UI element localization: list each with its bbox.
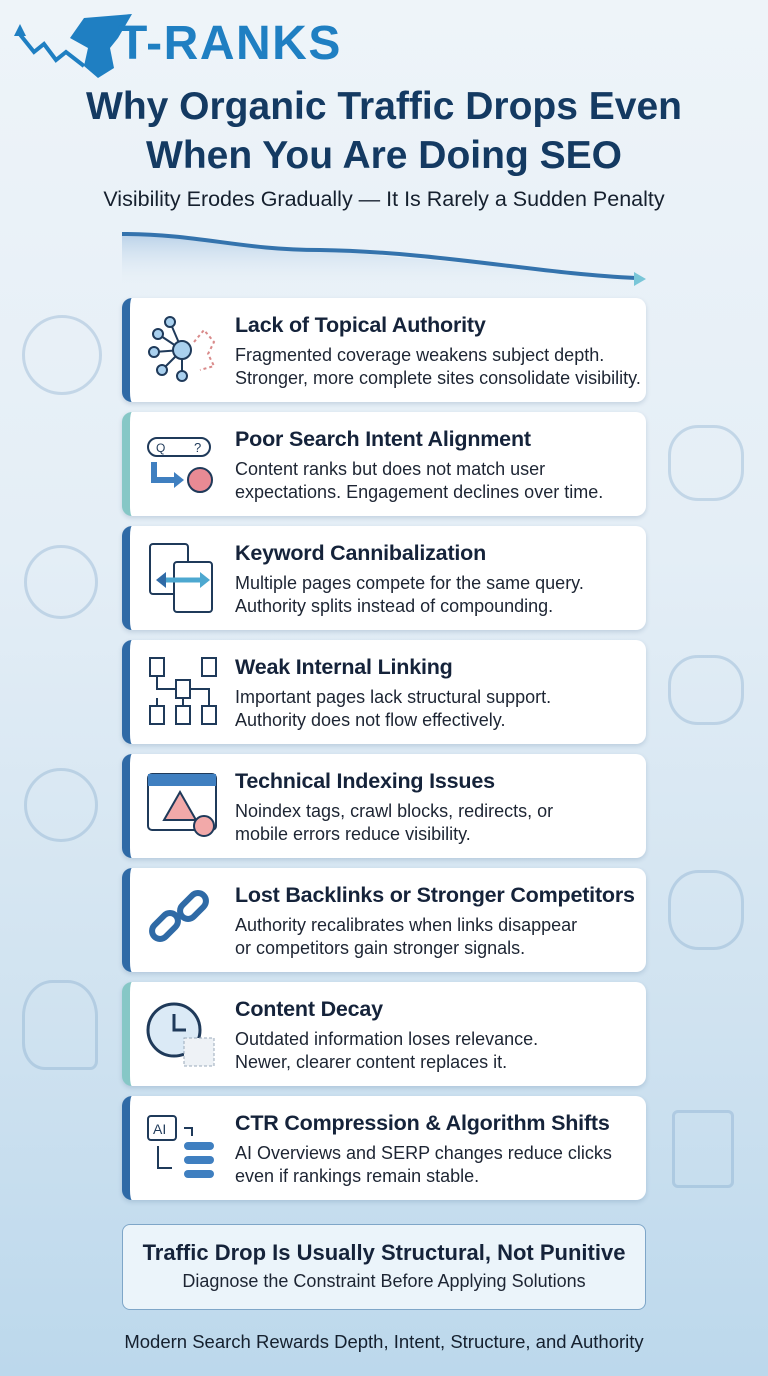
card 3 (122, 526, 646, 630)
icon: AI results (147, 1115, 214, 1178)
heading: Weak Internal Linking (235, 655, 453, 679)
logo (14, 14, 342, 78)
text: mobile errors reduce visibility. (235, 824, 471, 844)
heading: CTR Compression & Algorithm Shifts (235, 1111, 610, 1135)
heading: Keyword Cannibalization (235, 541, 486, 565)
text: Outdated information loses relevance. (235, 1029, 538, 1049)
icon: broken link (149, 890, 209, 942)
heading: Poor Search Intent Alignment (235, 427, 531, 451)
title: Why Organic Traffic Drops Even (86, 85, 682, 128)
text: Content ranks but does not match user (235, 459, 545, 479)
heading: Lack of Topical Authority (235, 313, 486, 337)
text: Authority recalibrates when links disappear (235, 915, 577, 935)
heading: Technical Indexing Issues (235, 769, 495, 793)
text (235, 459, 603, 502)
text: Fragmented coverage weakens subject depth. (235, 345, 604, 365)
summary text: Diagnose the Constraint Before Applying Solutions (182, 1271, 586, 1291)
text: even if rankings remain stable. (235, 1166, 479, 1186)
text: Authority does not flow effectively. (235, 710, 505, 730)
text: Multiple pages compete for the same query. (235, 573, 584, 593)
card 4 (122, 640, 646, 744)
text: Noindex tags, crawl blocks, redirects, or (235, 801, 553, 821)
text: Authority splits instead of compounding. (235, 596, 553, 616)
icon: site structure (149, 657, 217, 725)
side decorative icons (22, 315, 102, 395)
title: When You Are Doing SEO (146, 134, 622, 177)
icon: duplicate pages (149, 543, 213, 613)
icon: browser warning (147, 773, 217, 837)
card 7 (122, 982, 646, 1086)
heading: Lost Backlinks or Stronger Competitors (235, 883, 635, 907)
text (235, 573, 584, 616)
text: or competitors gain stronger signals. (235, 938, 525, 958)
icon: clock (146, 1002, 214, 1066)
text (235, 687, 551, 730)
footer: Modern Search Rewards Depth, Intent, Structure, and Authority (124, 1331, 644, 1352)
card 6 (122, 868, 646, 972)
heading: Content Decay (235, 997, 383, 1021)
logo: T-RANKS (118, 17, 342, 70)
summary heading: Traffic Drop Is Usually Structural, Not Punitive (143, 1240, 625, 1265)
card 8 (122, 1096, 646, 1200)
summary box (122, 1224, 646, 1310)
card 5 (122, 754, 646, 858)
text: Important pages lack structural support. (235, 687, 551, 707)
text (235, 801, 553, 844)
text: Stronger, more complete sites consolidate visibility. (235, 368, 641, 388)
declining trend line (122, 232, 646, 286)
title (86, 85, 682, 177)
icon: AI results: AI (153, 1121, 166, 1137)
card 2 (122, 412, 646, 516)
text (235, 1029, 538, 1072)
text: AI Overviews and SERP changes reduce clicks (235, 1143, 612, 1163)
icon: search intent: ? (194, 440, 201, 455)
icon: topic network (148, 316, 216, 382)
subtitle: Visibility Erodes Gradually — It Is Rarely a Sudden Penalty (103, 187, 665, 211)
text: Newer, clearer content replaces it. (235, 1052, 507, 1072)
card 1 (122, 298, 646, 402)
icon: search intent: Q (156, 441, 165, 455)
text (235, 345, 641, 388)
icon: search intent (147, 437, 213, 493)
text (235, 915, 577, 958)
text (235, 1143, 612, 1186)
text: expectations. Engagement declines over time. (235, 482, 603, 502)
